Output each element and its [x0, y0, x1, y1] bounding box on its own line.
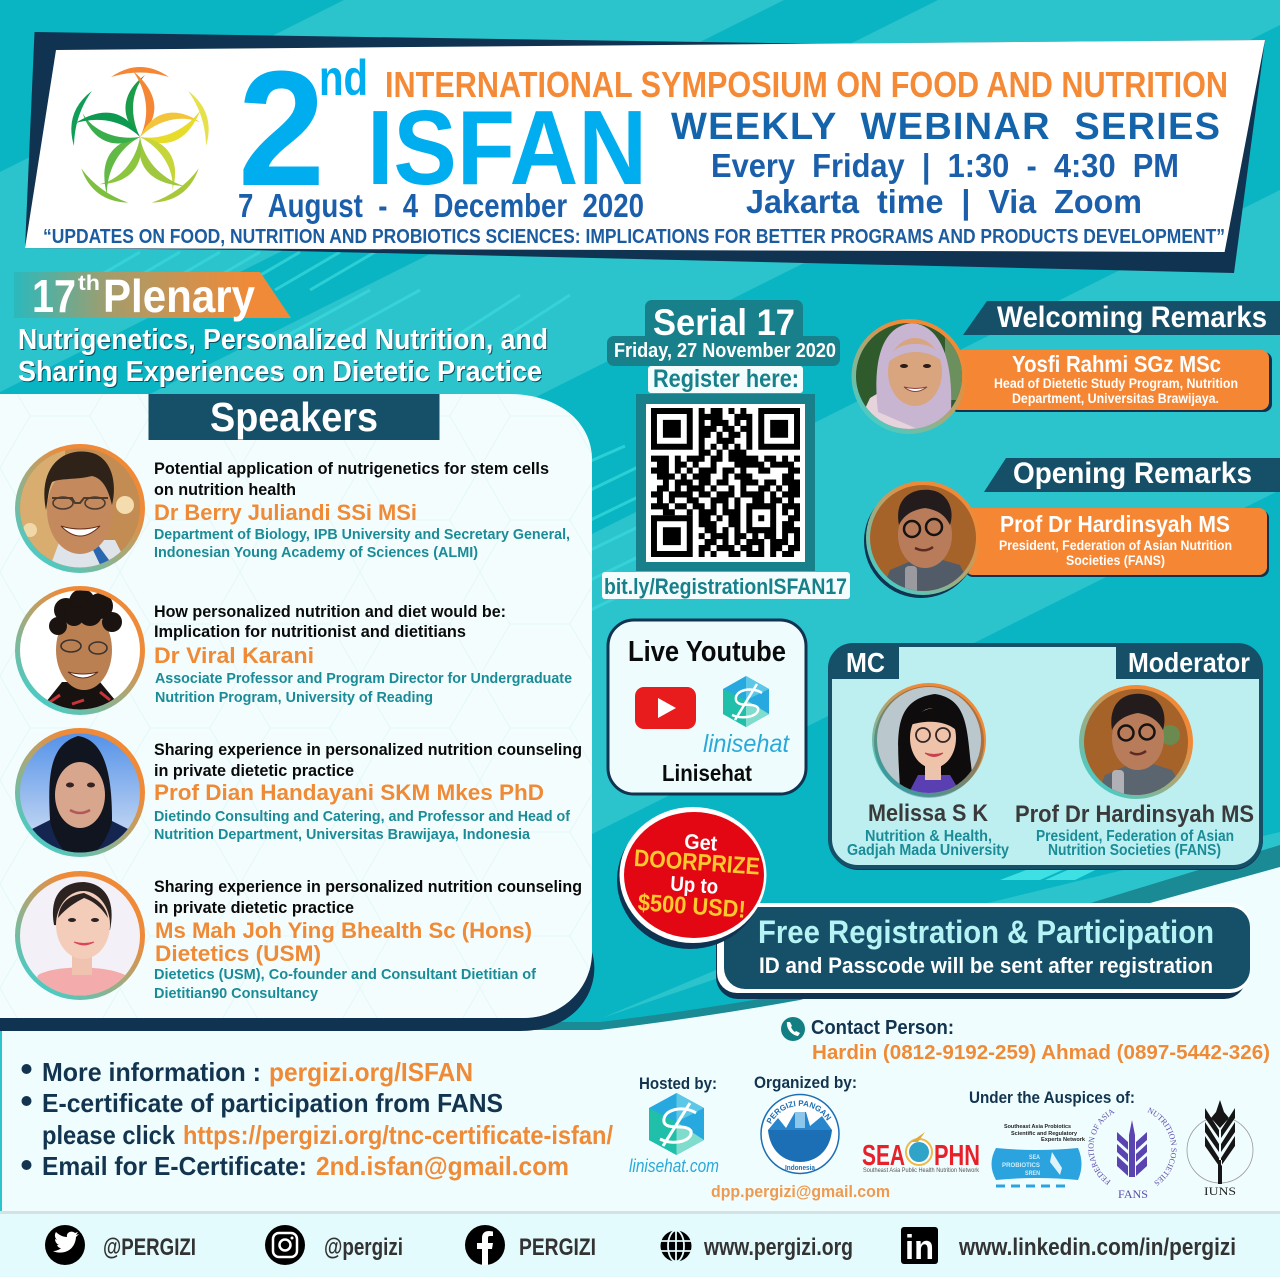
MC affiliation: Nutrition & Health, — [865, 828, 992, 845]
organized by: Organized by: — [754, 1074, 857, 1092]
welcoming speaker card: Yosfi Rahmi SGz MSc — [1012, 351, 1221, 377]
badge: doorprize: $500 USD! — [637, 889, 747, 924]
plenary topic heading: Nutrigenetics, Personalized Nutrition, and — [18, 324, 548, 356]
linkedin — [901, 1227, 1236, 1267]
moderator affiliation: Nutrition Societies (FANS) — [1048, 842, 1221, 859]
instagram handle: @pergizi — [324, 1234, 403, 1261]
logo: FANS: NUTRITION SOCIETIES — [1147, 1107, 1177, 1186]
time line: Every Friday | 1:30 - 4:30 PM — [711, 147, 1179, 184]
badge: doorprize: DOORPRIZE — [633, 845, 761, 881]
certificate line: please click — [42, 1120, 175, 1150]
speaker 3 — [15, 728, 582, 860]
opening speaker card: Prof Dr Hardinsyah MS — [1000, 511, 1230, 537]
plenary topic heading: Sharing Experiences on Dietetic Practice — [18, 356, 542, 388]
header navy backing — [25, 32, 1265, 273]
panel: MC and moderator — [828, 643, 1263, 870]
more information list — [22, 1057, 613, 1181]
icon: linisehat hexagon — [723, 676, 769, 727]
more information line — [42, 1057, 473, 1087]
plenary banner: 17 — [32, 270, 76, 322]
organized by: dpp.pergizi@gmail.com — [711, 1182, 890, 1201]
logo: SEA Probiotics — [992, 1124, 1086, 1186]
instagram handle — [265, 1225, 403, 1265]
organized by — [711, 1074, 890, 1201]
hosted by: Hosted by: — [639, 1075, 717, 1093]
speaker name: Dr Viral Karani — [154, 643, 314, 668]
callout: free registration — [716, 903, 1250, 999]
card background — [608, 620, 806, 794]
more information line: pergizi.org/ISFAN — [269, 1057, 473, 1087]
MC affiliation — [847, 828, 1009, 859]
speaker affiliation — [154, 966, 537, 1002]
opening speaker card: Societies (FANS) — [1066, 553, 1165, 568]
hosted by: linisehat.com — [629, 1156, 719, 1176]
speaker 1 — [15, 444, 570, 580]
logo: SEA Probiotics: Scientific and Regulatory — [1011, 1131, 1078, 1137]
speaker name: Prof Dian Handayani SKM Mkes PhD — [154, 780, 544, 805]
speaker affiliation — [155, 670, 572, 706]
panel: speakers — [0, 394, 594, 1031]
certificate line: E-certificate of participation from FANS — [42, 1088, 503, 1118]
under the auspices of: Under the Auspices of: — [969, 1089, 1135, 1107]
photo: Dr Berry Juliandi — [15, 444, 145, 580]
speaker affiliation: Nutrition Department, Universitas Brawijaya, Indonesia — [154, 826, 531, 843]
speaker name: Dietetics (USM) — [155, 941, 321, 966]
hosted by — [629, 1075, 719, 1176]
speaker affiliation: Dietitian90 Consultancy — [154, 985, 319, 1002]
speaker 4 — [15, 871, 582, 1002]
twitter handle — [45, 1225, 196, 1265]
MC name: Melissa S K — [868, 800, 989, 827]
speaker affiliation: Nutrition Program, University of Reading — [155, 689, 433, 706]
talk title — [154, 740, 582, 780]
panel: welcoming remarks — [850, 301, 1280, 435]
photo: Ms Mah Joh Ying — [15, 871, 145, 1001]
big 2nd ordinal: nd — [319, 50, 368, 106]
panel shadow — [829, 646, 1263, 870]
logo: SEA Probiotics: PROBIOTICS — [1002, 1162, 1041, 1169]
speaker affiliation: Associate Professor and Program Director for Undergraduate — [155, 670, 572, 687]
plenary banner — [14, 270, 291, 322]
email line — [42, 1151, 569, 1181]
email line: 2nd.isfan@gmail.com — [316, 1151, 569, 1181]
icon: youtube — [635, 687, 696, 729]
icon: Pergizi Pangan logo: PERGIZI PANGAN — [766, 1100, 832, 1124]
talk title: Sharing experience in personalized nutrition counseling — [154, 740, 582, 759]
website: www.pergizi.org — [703, 1234, 853, 1261]
welcoming speaker card: Head of Dietetic Study Program, Nutrition — [994, 376, 1238, 391]
facebook handle: PERGIZI — [519, 1234, 596, 1261]
event dates: 7 August - 4 December 2020 — [238, 187, 644, 224]
linisehat wordmark: linisehat — [703, 730, 790, 758]
logo: IUNS — [1187, 1100, 1253, 1198]
ISFAN wordmark: ISFAN — [367, 89, 647, 207]
moderator affiliation — [1036, 828, 1234, 859]
opening speaker card — [965, 508, 1269, 577]
icon: Pergizi Pangan logo: Indonesia — [785, 1165, 815, 1172]
facebook handle — [465, 1225, 596, 1265]
card heading: Live Youtube — [628, 636, 786, 668]
speaker 2 — [15, 586, 572, 716]
photo: Prof Dian Handayani — [15, 728, 145, 860]
channel name: Linisehat — [662, 760, 752, 786]
logo: FANS: FEDERATION OF ASIAN — [1088, 1110, 1115, 1186]
bullet dots — [22, 1064, 32, 1170]
MC affiliation: Gadjah Mada University — [847, 842, 1009, 859]
more information line: More information : — [42, 1057, 261, 1087]
panel: live youtube — [608, 620, 806, 794]
photo: Prof Dr Hardinsyah — [864, 480, 980, 598]
website — [660, 1230, 853, 1262]
talk title — [154, 459, 549, 499]
badge: doorprize — [617, 807, 766, 949]
logo: SEA PHN: PHN — [934, 1140, 980, 1172]
MC tab: MC — [846, 647, 885, 678]
welcoming speaker card — [950, 350, 1272, 412]
badge: doorprize: Up to — [670, 872, 719, 899]
icon: phone — [781, 1017, 805, 1041]
speaker name: Dr Berry Juliandi SSi MSi — [154, 500, 417, 525]
location line: Jakarta time | Via Zoom — [746, 183, 1142, 220]
moderator affiliation: President, Federation of Asian — [1036, 828, 1234, 845]
footer bar — [0, 1211, 1280, 1277]
contact person: Hardin (0812-9192-259) Ahmad (0897-5442-326) — [812, 1042, 1270, 1064]
speaker affiliation: Indonesian Young Academy of Sciences (ALMI) — [154, 544, 478, 561]
talk title: Sharing experience in personalized nutrition counseling — [154, 877, 582, 896]
photo: moderator — [1078, 685, 1194, 800]
talk title: How personalized nutrition and diet would be: — [154, 602, 506, 621]
photo: Melissa S K — [870, 683, 990, 800]
logo: SEA PHN: Southeast Asia Public Health Nutrition Network — [863, 1168, 980, 1174]
MC tab — [828, 643, 899, 679]
talk title: in private dietetic practice — [154, 761, 354, 780]
big 2nd ordinal: 2 — [238, 37, 325, 220]
logo: FANS: FANS — [1118, 1187, 1148, 1201]
talk title: Potential application of nutrigenetics for stem cells — [154, 459, 549, 478]
registration column — [602, 300, 850, 599]
logo: SEA Probiotics: SEA — [1029, 1154, 1040, 1161]
contact person: Contact Person: — [811, 1017, 954, 1039]
session date — [607, 336, 840, 366]
icon: linisehat logo — [649, 1093, 704, 1155]
webinar series line: WEEKLY WEBINAR SERIES — [671, 106, 1220, 148]
speakers panel shadow — [0, 952, 594, 1031]
icon: Pergizi Pangan logo — [760, 1094, 840, 1174]
photo: Yosfi Rahmi — [850, 319, 970, 435]
speaker affiliation: Department of Biology, IPB University and Secretary General, — [154, 526, 570, 543]
speaker affiliation: Dietindo Consulting and Catering, and Professor and Head of — [154, 808, 571, 825]
plenary topic heading — [18, 324, 548, 388]
register label: Register here: — [653, 365, 799, 393]
callout: free registration: Free Registration & Participation — [758, 914, 1214, 950]
panel: opening remarks — [864, 457, 1280, 598]
icon: ISFAN flower logo — [64, 67, 216, 211]
pale lower section — [0, 845, 1280, 1277]
email line: Email for E-Certificate: — [42, 1151, 307, 1181]
speaker name: Ms Mah Joh Ying Bhealth Sc (Hons) — [155, 918, 532, 943]
speaker affiliation — [154, 808, 571, 843]
plenary banner: th — [78, 272, 100, 295]
speaker affiliation: Dietetics (USM), Co-founder and Consultant Dietitian of — [154, 966, 537, 983]
registration link: bit.ly/RegistrationISFAN17 — [604, 574, 847, 599]
speaker affiliation — [154, 526, 570, 561]
header white panel — [25, 40, 1265, 252]
talk title: Implication for nutritionist and dietitians — [154, 622, 466, 641]
certificate line — [42, 1088, 613, 1150]
serial number: Serial 17 — [653, 302, 795, 343]
linkedin: in — [905, 1229, 934, 1267]
talk title — [154, 877, 582, 917]
twitter handle: @PERGIZI — [103, 1234, 196, 1261]
speakers heading: Speakers — [210, 394, 378, 440]
callout: free registration: ID and Passcode will be sent after registration — [759, 953, 1213, 978]
logo: IUNS: IUNS — [1204, 1184, 1236, 1198]
logo: SEA Probiotics: Southeast Asia Probiotics — [1004, 1124, 1071, 1130]
speakers panel body — [0, 394, 592, 1018]
talk title: on nutrition health — [154, 480, 296, 499]
panel body — [830, 645, 1261, 867]
moderator tab: Moderator — [1128, 647, 1250, 678]
header banner — [25, 32, 1265, 273]
speakers heading — [148, 394, 440, 440]
photo: Dr Viral Karani — [15, 586, 145, 716]
logo: SEA Probiotics: SREN — [1025, 1170, 1040, 1177]
badge: doorprize: Get — [683, 830, 718, 856]
opening heading: Opening Remarks — [1013, 457, 1252, 490]
welcoming speaker card: Department, Universitas Brawijaya. — [1012, 391, 1219, 406]
plenary banner: Plenary — [103, 270, 255, 322]
talk title: in private dietetic practice — [154, 898, 354, 917]
logo: SEA PHN: SEA — [862, 1140, 905, 1172]
opening speaker card: President, Federation of Asian Nutrition — [999, 538, 1232, 553]
certificate line: https://pergizi.org/tnc-certificate-isfan/ — [183, 1120, 613, 1150]
QR code — [636, 394, 815, 571]
linkedin: www.linkedin.com/in/pergizi — [958, 1234, 1236, 1261]
speaker name — [155, 918, 532, 966]
moderator name: Prof Dr Hardinsyah MS — [1015, 801, 1254, 828]
session date: Friday, 27 November 2020 — [614, 340, 836, 362]
talk title — [154, 602, 506, 641]
logo: SEA PHN — [862, 1132, 980, 1174]
logo: SEA Probiotics: Experts Network — [1041, 1137, 1086, 1143]
contact person — [781, 1017, 1270, 1064]
